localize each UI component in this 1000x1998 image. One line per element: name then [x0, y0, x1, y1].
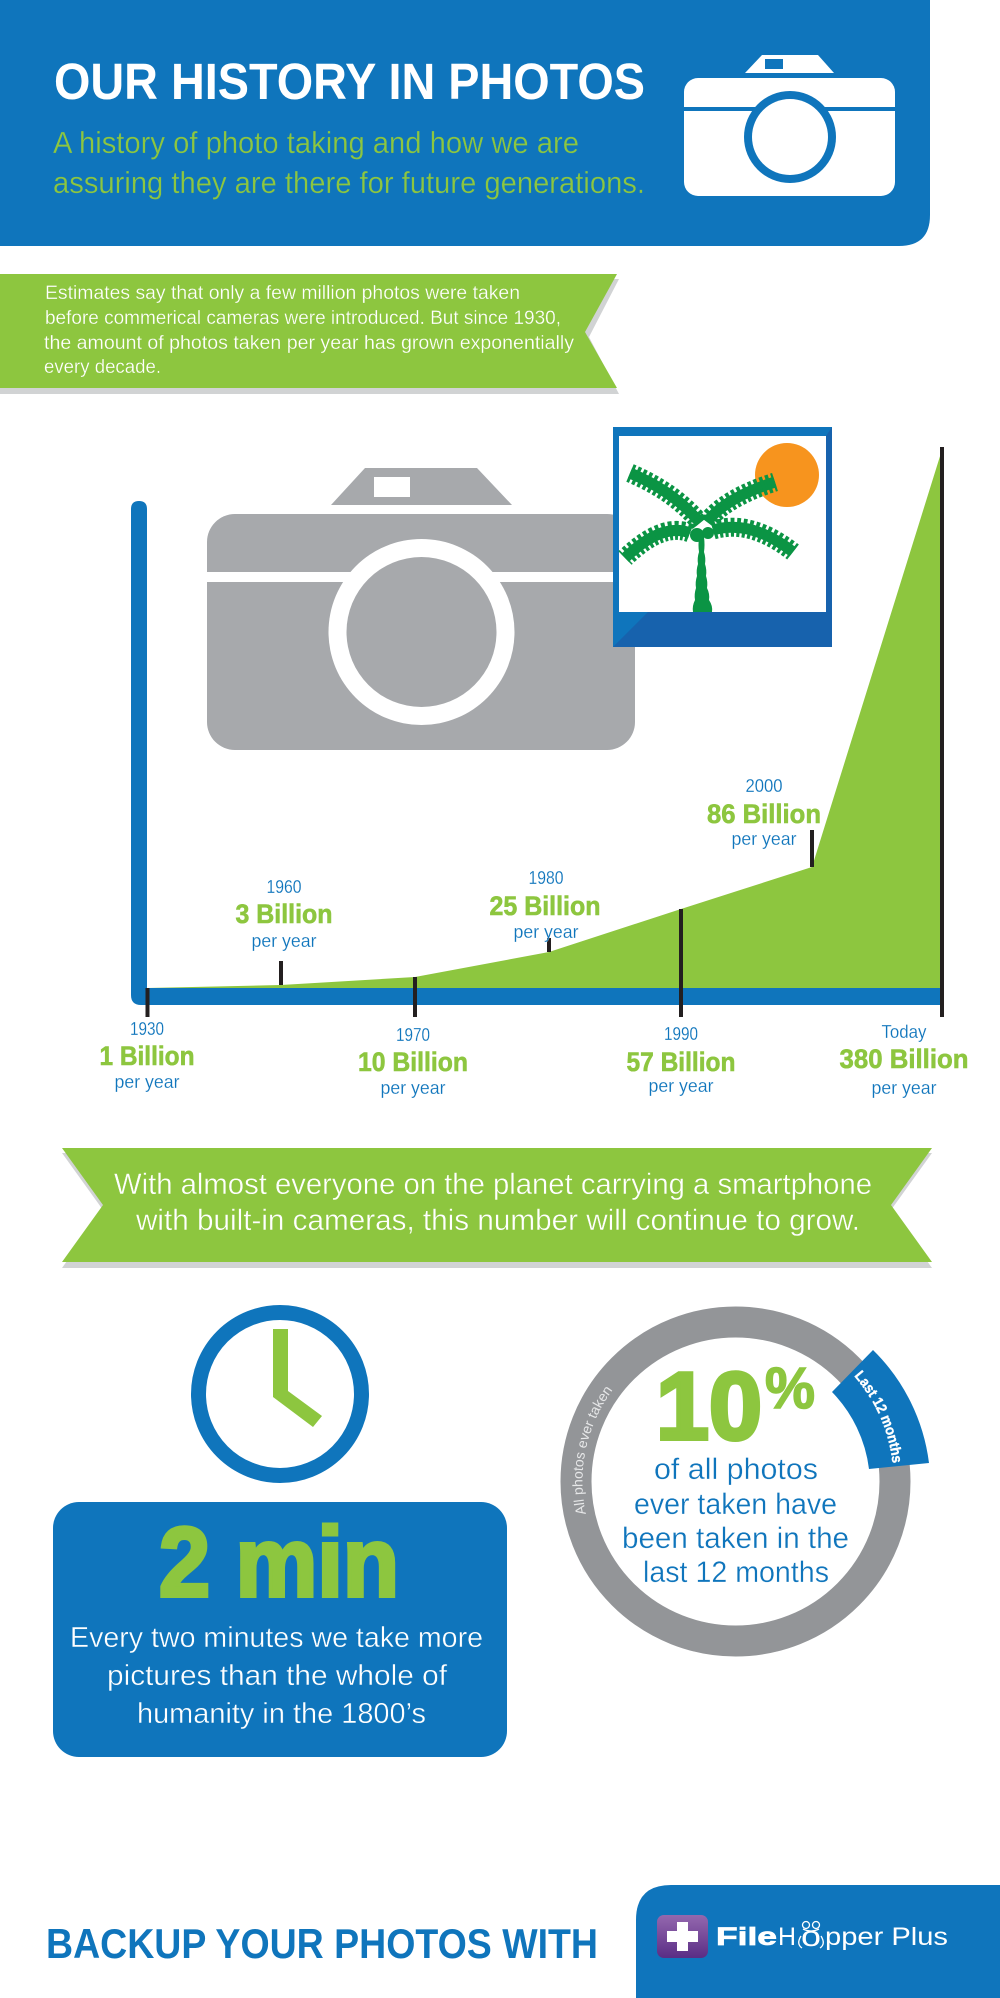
ring segment: last 12 months	[832, 1350, 929, 1469]
data label: 1980: 25 Billion	[490, 891, 600, 921]
ribbon: intro text: the amount of photos taken per year has grown exponentially	[44, 333, 575, 354]
icon: large grey camera	[207, 468, 635, 750]
panel: FileHopper logo	[636, 1885, 1000, 1998]
ribbon: smartphone statement	[62, 1148, 932, 1268]
big stat: 2 min: 2 min	[159, 1507, 399, 1617]
text block: ever taken have	[634, 1488, 837, 1521]
data label: 1960: 1960	[266, 877, 302, 897]
data label: 1970: per year	[380, 1078, 446, 1098]
data label: 1990: per year	[648, 1076, 714, 1096]
area series	[147, 453, 941, 988]
text block	[70, 1622, 483, 1730]
text block	[622, 1453, 849, 1589]
logo wordmark	[716, 1921, 948, 1953]
logo wordmark: H	[778, 1923, 796, 1951]
panel: header banner	[0, 0, 930, 246]
ribbon: intro text	[0, 274, 619, 394]
title: OUR HISTORY IN PHOTOS	[54, 53, 645, 110]
subtitle	[53, 125, 645, 200]
data label: 2000	[707, 776, 821, 849]
data label: 1980: 1980	[528, 868, 564, 888]
text block: of all photos	[654, 1453, 818, 1486]
data label: 1970: 10 Billion	[358, 1047, 468, 1077]
big stat: 10 percent: %	[765, 1356, 815, 1421]
footer heading: BACKUP YOUR PHOTOS WITH	[46, 1920, 598, 1967]
data label: 1930	[100, 1019, 194, 1092]
icon: purple plus	[657, 1915, 708, 1958]
data label: 1930: 1930	[130, 1019, 164, 1039]
icon: header camera	[684, 55, 895, 196]
ribbon: smartphone statement: with built-in cameras, this number will continue to grow.	[135, 1204, 860, 1237]
data label: today: per year	[872, 1078, 936, 1098]
data label: 1970	[358, 1025, 468, 1098]
subtitle: A history of photo taking and how we are	[53, 125, 579, 160]
data label: 1990: 1990	[664, 1024, 698, 1044]
big stat: 10 percent	[656, 1353, 815, 1460]
icon: frog	[799, 1922, 823, 1948]
data label: 1980	[490, 868, 600, 942]
text block: pictures than the whole of	[107, 1660, 448, 1692]
data label: 1990: 57 Billion	[626, 1047, 736, 1077]
data label: 1930: per year	[114, 1072, 180, 1092]
icon: polaroid photo with palm tree	[613, 427, 832, 647]
chart axes	[131, 501, 943, 1005]
data label: 2000: per year	[732, 829, 796, 849]
ribbon: intro text: every decade.	[44, 357, 161, 378]
data label: 1980: per year	[514, 922, 578, 942]
big stat: 10 percent: 10	[656, 1353, 762, 1460]
logo wordmark: File	[716, 1923, 777, 1951]
data label: 1970: 1970	[396, 1025, 430, 1045]
ribbon: intro text: Estimates say that only a few million photos were taken	[45, 283, 520, 304]
data label: 1990	[626, 1024, 736, 1096]
data label: 1960	[236, 877, 332, 951]
tick marks	[146, 447, 944, 1017]
text block: last 12 months	[643, 1556, 829, 1589]
data label: today: 380 Billion	[840, 1044, 968, 1074]
subtitle: assuring they are there for future generations.	[53, 165, 645, 200]
data label: today	[840, 1022, 968, 1098]
panel: two minutes	[53, 1502, 507, 1757]
ribbon: intro text: before commerical cameras were introduced. But since 1930,	[45, 308, 561, 329]
chart: ten percent ring	[560, 1306, 929, 1656]
data label: 2000: 2000	[746, 776, 782, 796]
chart: photos per year area chart	[131, 447, 944, 1017]
data label: 1930: 1 Billion	[100, 1041, 194, 1071]
logo wordmark: o	[801, 1921, 821, 1953]
text block: Every two minutes we take more	[70, 1622, 483, 1654]
logo wordmark: pper Plus	[825, 1923, 948, 1951]
data label: 1960: 3 Billion	[236, 899, 332, 929]
ring label: all photos ever taken: All photos ever taken	[572, 1387, 612, 1514]
data label: 2000: 86 Billion	[707, 799, 821, 829]
text block: been taken in the	[622, 1522, 849, 1555]
ring segment: last 12 months: Last 12 months	[854, 1370, 902, 1463]
text block: humanity in the 1800’s	[137, 1698, 426, 1730]
data label: 1960: per year	[252, 931, 316, 951]
icon: clock	[198, 1312, 362, 1476]
data label: today: Today	[882, 1022, 926, 1042]
ribbon: smartphone statement: With almost everyone on the planet carrying a smartphone	[114, 1168, 872, 1201]
